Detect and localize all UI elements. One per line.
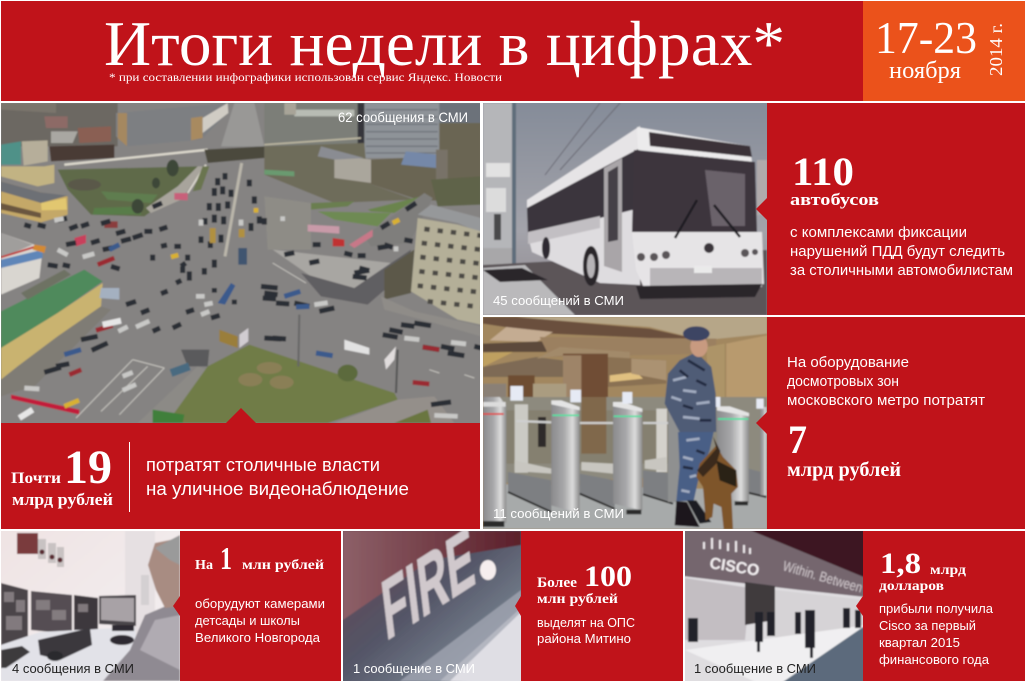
big number: 7 xyxy=(788,417,807,462)
message count: metro photo: 11 сообщений в СМИ xyxy=(493,506,624,521)
date panel xyxy=(863,1,1025,101)
description: прибыли получила xyxy=(879,601,994,616)
description: На оборудование xyxy=(787,354,909,371)
description xyxy=(790,224,1013,279)
description: Cisco за первый xyxy=(879,618,976,633)
year: 2014 г. xyxy=(986,23,1006,76)
amount prefix: Почти xyxy=(11,470,61,487)
description: Великого Новгорода xyxy=(195,630,321,645)
description: детсады и школы xyxy=(195,613,300,628)
title: Итоги недели в цифрах* xyxy=(104,9,785,79)
header banner xyxy=(1,1,863,101)
pointer arrow xyxy=(856,596,863,616)
unit: млн рублей xyxy=(242,558,324,573)
message count: monitors photo: 4 сообщения в СМИ xyxy=(12,661,134,676)
description: финансового года xyxy=(879,652,990,667)
description: оборудуют камерами xyxy=(195,596,325,611)
photo: fire alarm close-up xyxy=(343,510,521,681)
big number: 100 xyxy=(584,560,632,593)
pointer arrow xyxy=(515,596,521,616)
photo: operator at surveillance monitors xyxy=(1,531,180,681)
message count: Cisco photo: 1 сообщение в СМИ xyxy=(694,661,816,676)
panel: 1 mn roubles xyxy=(173,531,341,681)
pointer arrow xyxy=(173,596,180,616)
description xyxy=(879,601,994,667)
unit: млрд рублей xyxy=(12,490,113,509)
photo: aerial view of Moscow intersection xyxy=(1,103,480,423)
photo: metro inspection gates with guard and dog xyxy=(483,317,767,529)
description xyxy=(787,354,985,409)
unit: млн рублей xyxy=(537,592,618,607)
description: с комплексами фиксации xyxy=(790,224,967,241)
subtitle note: * при составлении инфографики использован сервис Яндекс. Новости xyxy=(109,70,503,84)
description xyxy=(195,596,325,645)
pointer arrow xyxy=(226,408,256,423)
unit: млрд рублей xyxy=(787,459,901,481)
big number: 1,8 xyxy=(880,547,921,580)
big number: 1 xyxy=(220,540,232,576)
big number: 19 xyxy=(64,441,112,494)
panel: 7 bn roubles metro xyxy=(756,317,1025,529)
description: потратят столичные власти xyxy=(146,455,380,475)
amount prefix: Более xyxy=(537,575,577,591)
photo: Cisco exhibition stand: CISCO xyxy=(708,555,760,580)
description xyxy=(146,455,409,499)
description: квартал 2015 xyxy=(879,635,960,650)
description: за столичными автомобилистам xyxy=(790,262,1013,279)
month: ноября xyxy=(889,58,961,84)
description: на уличное видеонаблюдение xyxy=(146,479,409,499)
date range: 17-23 xyxy=(875,13,977,63)
description: района Митино xyxy=(537,631,631,646)
description: выделят на ОПС xyxy=(537,615,635,630)
description: московского метро потратят xyxy=(787,392,985,409)
unit second line: долларов xyxy=(879,579,944,594)
panel: 100 mn roubles xyxy=(515,531,683,681)
pointer arrow xyxy=(756,412,767,434)
description xyxy=(537,615,635,646)
description: нарушений ПДД будут следить xyxy=(790,243,1005,260)
description: досмотровых зон xyxy=(787,373,899,390)
pointer arrow xyxy=(756,198,767,220)
message count: fire photo: 1 сообщение в СМИ xyxy=(353,661,475,676)
photo: articulated city bus xyxy=(483,103,767,315)
big number: 110 xyxy=(792,149,854,194)
amount prefix: На xyxy=(195,558,213,573)
message count: aerial photo: 62 сообщения в СМИ xyxy=(338,109,468,125)
panel: 110 buses xyxy=(756,103,1025,315)
message count: bus photo: 45 сообщений в СМИ xyxy=(493,293,624,308)
photo: Cisco exhibition stand xyxy=(685,531,864,681)
unit: автобусов xyxy=(790,190,879,209)
panel: Cisco 1.8 bn dollars xyxy=(856,531,1025,681)
panel: 19 bn roubles xyxy=(1,408,480,529)
unit: млрд xyxy=(930,563,966,578)
